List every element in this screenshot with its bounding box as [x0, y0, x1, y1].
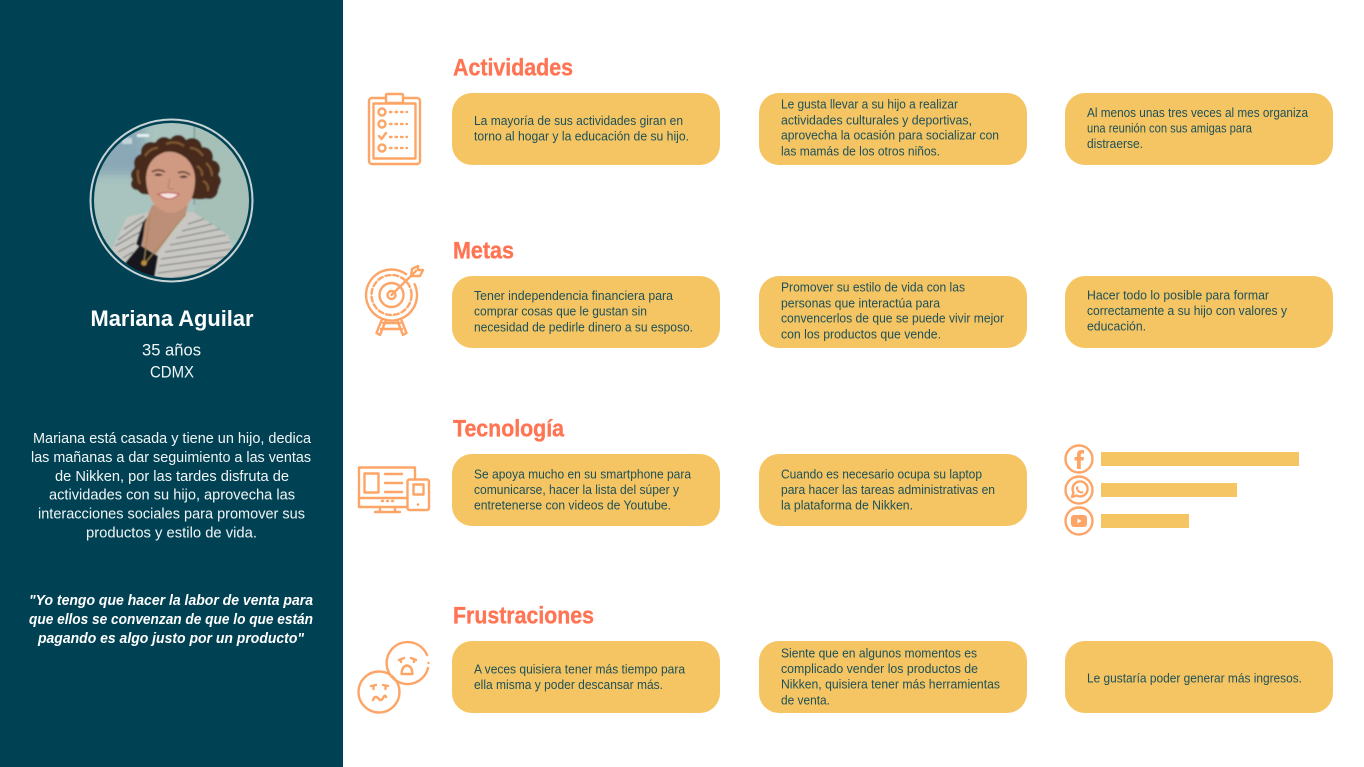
bar: whatsapp: [1101, 483, 1237, 497]
card: frustraciones 2: de venta.: [781, 694, 830, 708]
icon: facebook: [1066, 446, 1092, 472]
biography text: actividades con su hijo, aprovecha las: [49, 486, 295, 504]
panel: tecnologia: [359, 416, 1299, 534]
persona age: 35 años: [142, 342, 201, 360]
card: frustraciones 1: ella misma y poder descansar más.: [474, 678, 663, 692]
card: frustraciones 3: [1065, 641, 1333, 713]
card: metas 1: necesidad de pedirle dinero a su esposo.: [474, 320, 693, 334]
face: [146, 152, 195, 213]
card: actividades 1: La mayoría de sus actividades giran en: [474, 114, 683, 128]
card: tecnologia 1: entretenerse con videos de Youtube.: [474, 498, 671, 512]
card: actividades 3: Al menos unas tres veces al mes organiza: [1087, 106, 1308, 120]
jacket: [112, 212, 232, 278]
persona name: Mariana Aguilar: [90, 306, 254, 331]
portrait photo: [90, 120, 255, 285]
panel: frustraciones: [358, 602, 1333, 713]
icon: target with arrow: [366, 266, 423, 335]
card: metas 2: Promover su estilo de vida con las: [781, 280, 965, 294]
panel: metas: [366, 238, 1333, 348]
bar: youtube: [1101, 514, 1189, 528]
card: frustraciones 2: [759, 641, 1027, 713]
persona location: CDMX: [150, 364, 194, 382]
card: tecnologia 1: comunicarse, hacer la lista del súper y: [474, 483, 680, 497]
card: tecnologia 1: [452, 454, 720, 526]
card: metas 2: personas que interactúa para: [781, 296, 940, 310]
heading: actividades: Actividades: [453, 54, 573, 82]
card: tecnologia 2: [759, 454, 1027, 526]
biography text: interacciones sociales para promover sus: [38, 506, 305, 522]
card: actividades 3: una reunión con sus amigas para: [1087, 122, 1252, 136]
card: actividades 2: las mamás de los otros niños.: [781, 144, 940, 158]
card: actividades 2: [759, 93, 1027, 165]
card: metas 2: con los productos que vende.: [781, 328, 941, 342]
top: [125, 245, 158, 280]
biography text: productos y estilo de vida.: [86, 524, 257, 542]
quote: [29, 593, 313, 647]
heading: tecnologia: Tecnología: [453, 416, 565, 442]
icon: whatsapp: [1066, 476, 1092, 504]
quote: que ellos se convenzan de que lo que están: [29, 612, 313, 628]
card: metas 1: comprar cosas que le gustan sin: [474, 304, 647, 318]
card: tecnologia 2: la plataforma de Nikken.: [781, 498, 913, 512]
quote: pagando es algo justo por un producto": [37, 631, 305, 647]
card: metas 2: convencerlos de que se puede vivir mejor: [781, 312, 1004, 326]
bar: facebook: [1101, 452, 1299, 466]
card: actividades 3: distraerse.: [1087, 137, 1143, 151]
icon: youtube: [1066, 508, 1092, 534]
card: frustraciones 1: [452, 641, 720, 713]
skin: [142, 205, 188, 254]
panel: actividades: [369, 54, 1333, 165]
card: frustraciones 2: Nikken, quisiera tener más herramientas: [781, 678, 1000, 692]
card: tecnologia 1: Se apoya mucho en su smartphone para: [474, 468, 691, 482]
card: actividades 2: Le gusta llevar a su hijo a realizar: [781, 98, 958, 112]
icon: desktop and smartphone: [359, 468, 429, 512]
card: metas 3: [1065, 276, 1333, 348]
card: metas 3: correctamente a su hijo con valores y: [1087, 304, 1288, 318]
chart: social media usage: [1066, 446, 1299, 534]
card: tecnologia 2: Cuando es necesario ocupa su laptop: [781, 468, 982, 482]
card: metas 2: [759, 276, 1027, 348]
card: metas 1: Tener independencia financiera para: [474, 289, 673, 303]
biography text: las mañanas a dar seguimiento a las ventas: [31, 449, 311, 466]
heading: metas: Metas: [453, 238, 514, 264]
biography text: [31, 430, 312, 542]
heading: frustraciones: Frustraciones: [453, 602, 594, 630]
card: actividades 3: [1065, 93, 1333, 165]
icon: clipboard checklist: [369, 94, 420, 164]
card: frustraciones 1: A veces quisiera tener más tiempo para: [474, 662, 685, 676]
card: frustraciones 3: Le gustaría poder generar más ingresos.: [1087, 672, 1302, 686]
card: actividades 1: torno al hogar y la educación de su hijo.: [474, 130, 689, 144]
card: frustraciones 2: complicado vender los productos de: [781, 662, 978, 676]
card: frustraciones 2: Siente que en algunos momentos es: [781, 646, 977, 660]
icon: sad faces: [358, 642, 430, 712]
biography text: Mariana está casada y tiene un hijo, dedica: [33, 430, 312, 447]
hair: [133, 139, 220, 199]
card: metas 3: Hacer todo lo posible para formar: [1087, 288, 1269, 302]
card: actividades 2: actividades culturales y deportivas,: [781, 114, 972, 128]
panel: profile sidebar: [0, 0, 343, 767]
card: actividades 2: aprovecha la ocasión para socializar con: [781, 128, 999, 142]
biography text: de Nikken, por las tardes disfruta de: [55, 468, 289, 485]
quote: "Yo tengo que hacer la labor de venta para: [29, 593, 313, 609]
card: metas 3: educación.: [1087, 320, 1146, 334]
card: actividades 1: [452, 93, 720, 165]
card: tecnologia 2: para hacer las tareas administrativas en: [781, 483, 995, 497]
card: metas 1: [452, 276, 720, 348]
